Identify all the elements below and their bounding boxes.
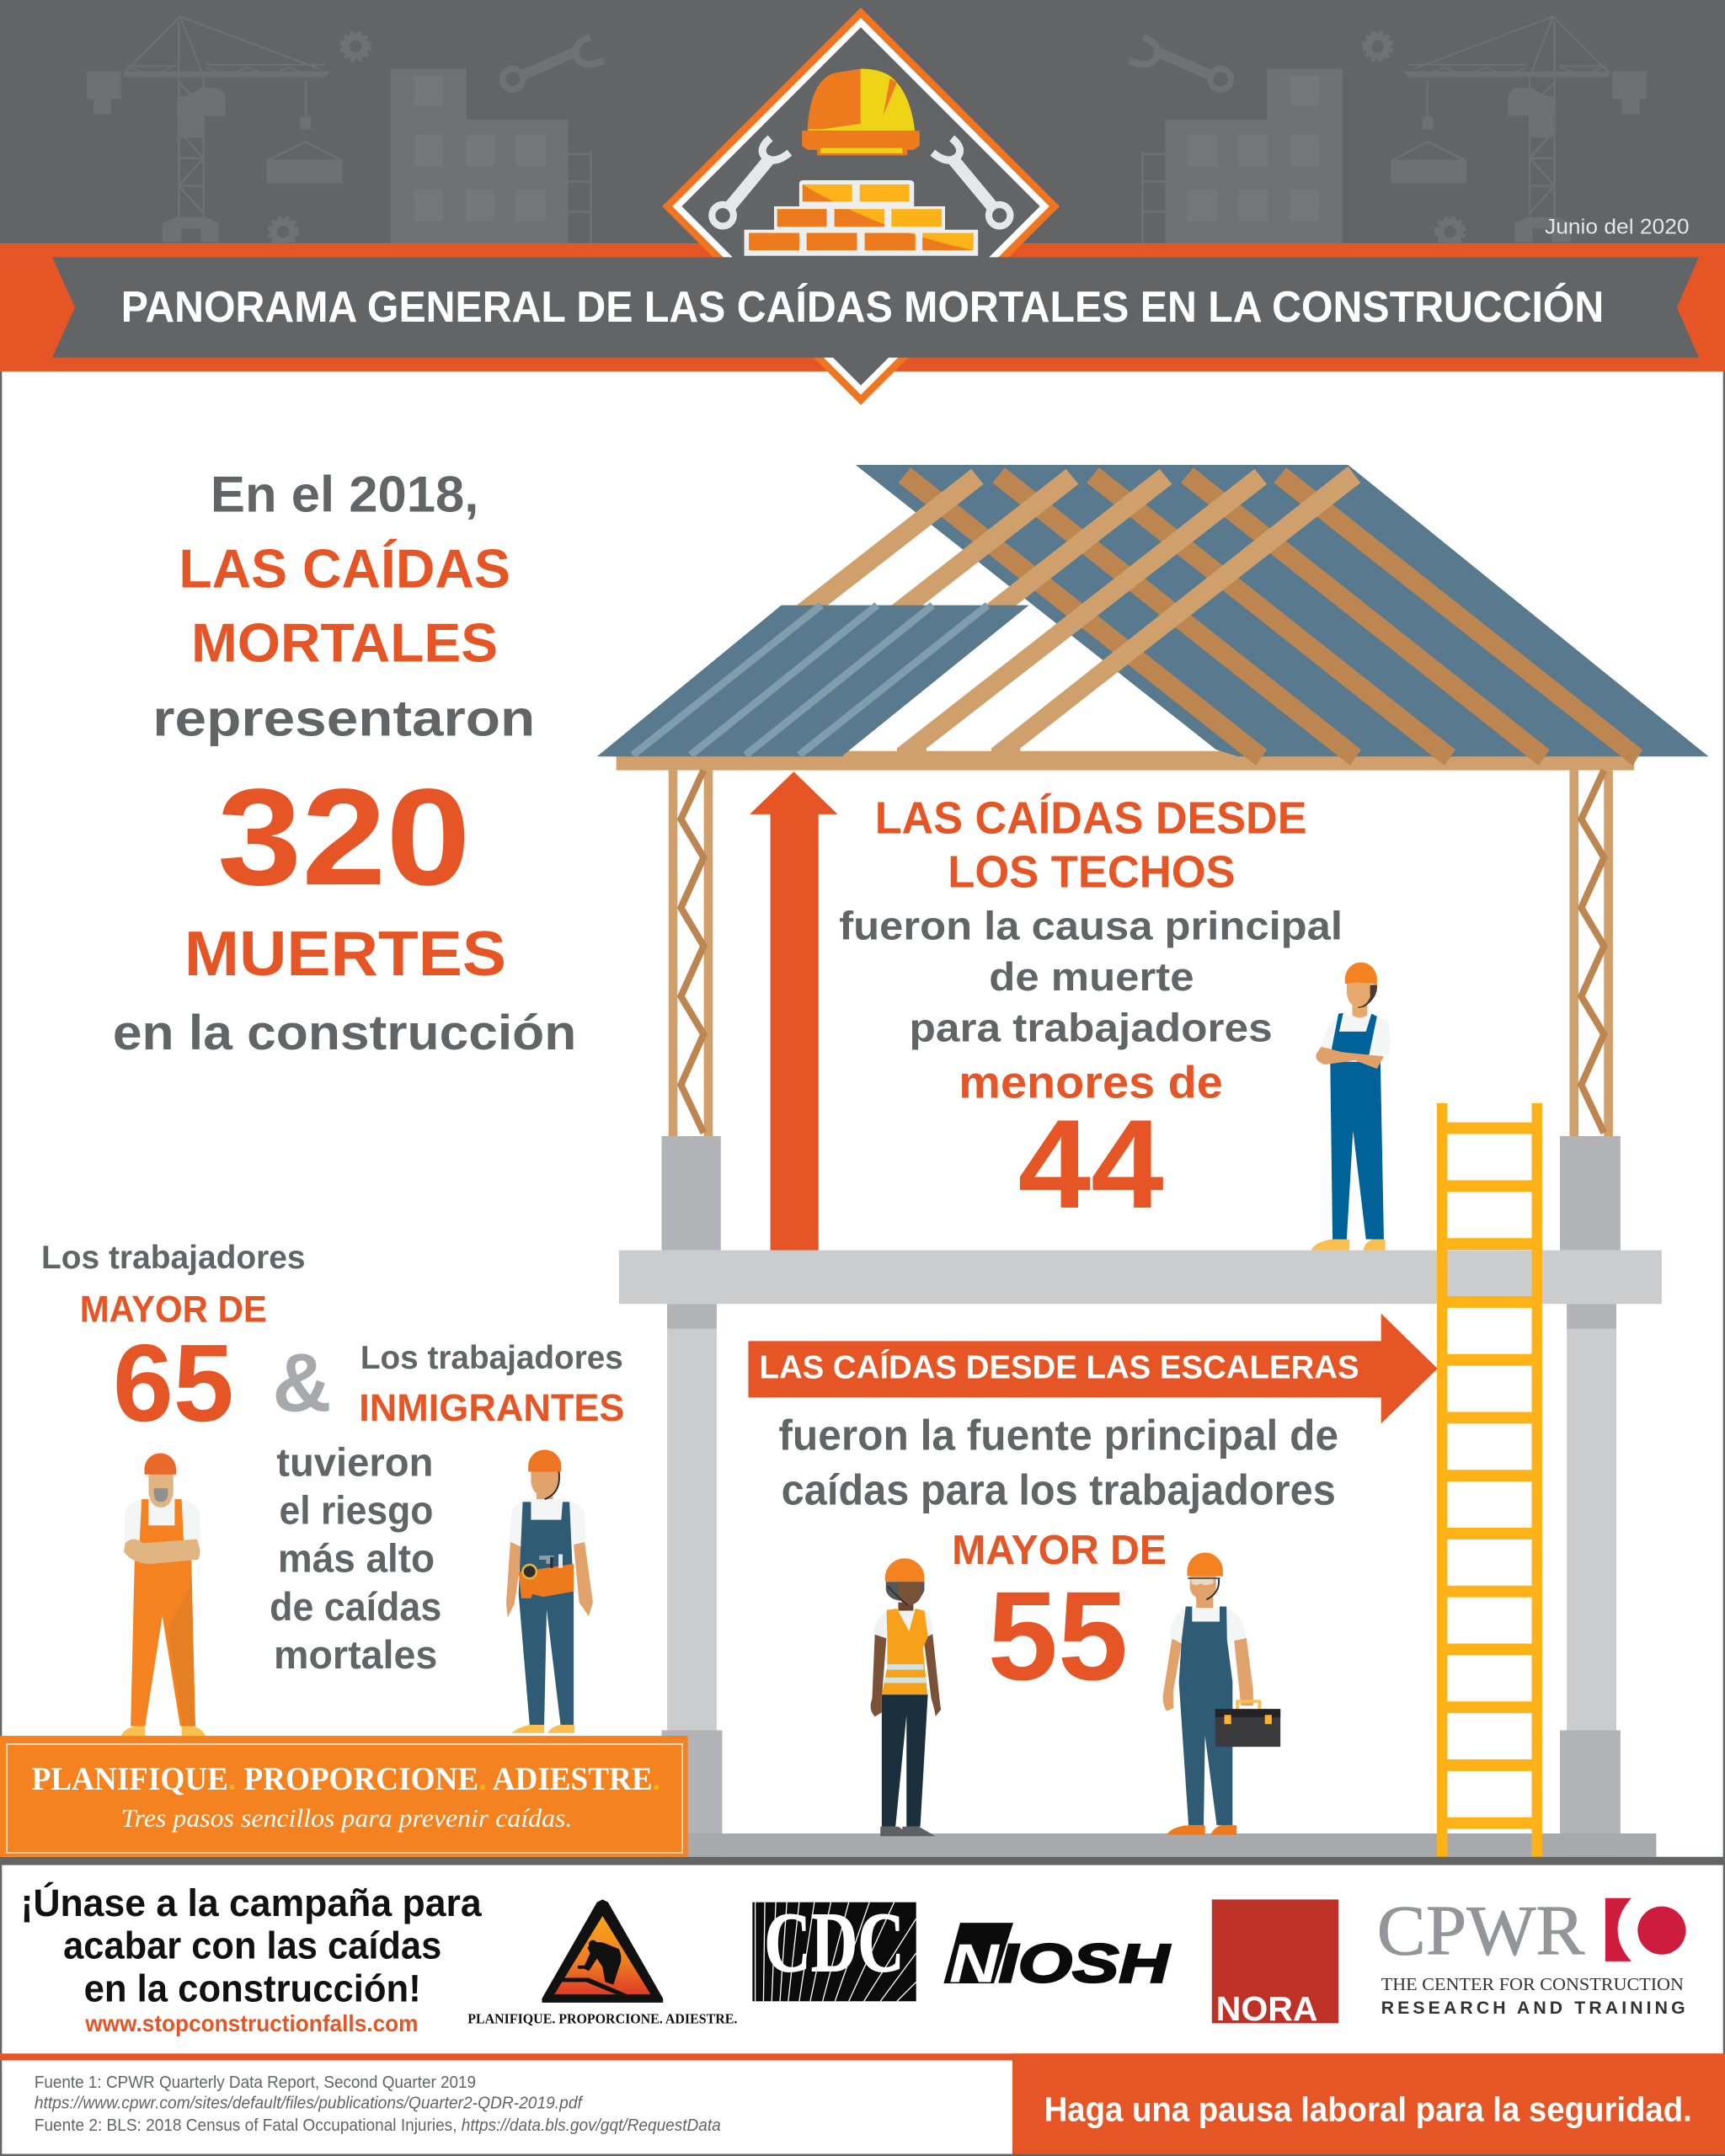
logo: CPWR: CPWR [1377,1892,1585,1971]
ladder [1437,1103,1542,1858]
callout: plan provide train: Tres pasos sencillos para prevenir caídas. [121,1803,572,1833]
icon: hard hat [802,69,920,156]
worker: blue overalls, tool belt [506,1449,593,1733]
stat text block: 320 deaths: representaron [152,690,535,747]
sources [35,2073,721,2135]
icon: tool belt [519,1554,574,1598]
logo: CPWR: THE CENTER FOR CONSTRUCTION [1381,1974,1684,1994]
text block: older and immigrant workers [41,1240,624,1678]
text block: older and immigrant workers: de caídas [270,1585,441,1630]
arrow label: LAS CAÍDAS DESDE LAS ESCALERAS [760,1348,1359,1385]
callout: plan provide train: PLANIFIQUE. PROPORCIONE. ADIESTRE. [32,1761,660,1797]
house structure [597,465,1708,1857]
floor slab [619,1251,1662,1304]
text block: older and immigrant workers: & [272,1337,332,1429]
text block: ladder falls: fueron la fuente principal de [778,1411,1338,1459]
text block: roof falls: LAS CAÍDAS DESDE [875,793,1307,844]
text block: ladder falls: MAYOR DE [952,1528,1167,1573]
logo: NIOSH [943,1923,1172,1993]
text block: ladder falls: 55 [988,1565,1128,1706]
dark rafters [898,467,1642,766]
slogan: Haga una pausa laboral para la seguridad. [1044,2089,1692,2128]
header background band [0,0,1725,246]
roof beam [617,751,1634,771]
text block: older and immigrant workers: el riesgo [280,1489,433,1534]
worker: with toolbox [1163,1553,1280,1835]
text block: roof falls: menores de [959,1057,1223,1107]
logo: NORA [1212,1899,1338,2028]
arrow: toward the ladder [748,1314,1438,1423]
campaign text [20,1881,482,2036]
icon: brick pile [743,179,984,256]
logo: Plan Provide Train [467,1899,737,2026]
left truss post [669,771,713,1136]
icon: wrench right [932,138,1010,226]
text block: roof falls: 44 [1018,1093,1164,1235]
ground slab [688,1833,1656,1857]
stat text block: 320 deaths: En el 2018, [211,466,478,523]
text block: older and immigrant workers: MAYOR DE [80,1289,267,1330]
text block: ladder falls: caídas para los trabajadores [782,1466,1336,1514]
worker: orange overalls, arms crossed [121,1453,206,1736]
right truss post [1569,771,1613,1136]
campaign text: acabar con las caídas [63,1924,441,1967]
text block: older and immigrant workers: 65 [113,1321,234,1444]
text block: older and immigrant workers: Los trabajadores [360,1340,623,1376]
logo: Plan Provide Train: PLANIFIQUE. PROPORCIONE. ADIESTRE. [467,2010,737,2026]
logo: CPWR: RESEARCH AND TRAINING [1381,1999,1685,2018]
text block: roof falls: fueron la causa principal [839,904,1343,948]
stat text block: 320 deaths: MUERTES [184,918,506,989]
text block: older and immigrant workers: INMIGRANTES [359,1386,624,1429]
text block: older and immigrant workers: más alto [278,1537,435,1582]
text block: roof falls: de muerte [989,955,1194,1000]
text block: roof falls [839,793,1343,1235]
footer band [0,2053,1725,2156]
lower columns [667,1304,1616,1731]
orange title band [0,243,1725,371]
campaign text: en la construcción! [84,1967,421,2009]
title ribbon [52,257,1699,358]
text block: older and immigrant workers: Los trabajadores [41,1240,306,1276]
logo: CDC: CDC [764,1895,905,1989]
text block: roof falls: para trabajadores [910,1006,1273,1050]
stat text block: 320 deaths: LAS CAÍDAS [179,537,510,599]
sources: Fuente 2: BLS: 2018 Census of Fatal Occupational Injuries, https://data.bls.gov/gqt/RequestData [35,2116,721,2135]
dark line under main area [0,1857,1725,1865]
back roof panel [856,465,1708,756]
logo: NIOSH: IOSH [999,1932,1172,1993]
text block: older and immigrant workers: tuvieron [276,1440,433,1485]
campaign text: ¡Únase a la campaña para [20,1881,482,1924]
logo: NIOSH: N [949,1932,1001,1993]
icon: toolbox [1215,1701,1280,1747]
worker: safety vest [871,1558,941,1836]
callout: plan provide train [0,1736,688,1857]
column caps [667,1304,1616,1329]
logo: CPWR [1377,1892,1685,2018]
sources: Fuente 1: CPWR Quarterly Data Report, Second Quarter 2019 [35,2073,476,2092]
date: Junio del 2020 [1545,216,1690,239]
stat text block: 320 deaths: en la construcción [113,1006,576,1060]
campaign text: www.stopconstructionfalls.com [84,2010,418,2036]
title: PANORAMA GENERAL DE LAS CAÍDAS MORTALES EN LA CONSTRUCCIÓN [121,283,1604,332]
icon: wrench left [712,138,789,226]
light rafters [613,467,1360,760]
stat text block: 320 deaths: MORTALES [191,612,498,674]
text block: roof falls: LOS TECHOS [948,846,1236,897]
text block: ladder falls [778,1411,1338,1706]
stat text block: 320 deaths: 320 [217,760,471,914]
stat text block: 320 deaths [113,466,576,1060]
text block: older and immigrant workers: mortales [274,1633,437,1678]
front roof panel [597,606,1029,756]
roof panel highlights [633,606,988,755]
worker: arms crossed on upper floor [1311,963,1390,1251]
column bases [662,1731,1621,1857]
sources: https://www.cpwr.com/sites/default/files/publications/Quarter2-QDR-2019.pdf [35,2095,584,2113]
emblem: diamond badge [662,8,1060,405]
upper column blocks [662,1136,1621,1251]
logo: NORA: NORA [1216,1989,1318,2028]
arrow: up to the roof [750,771,838,1251]
